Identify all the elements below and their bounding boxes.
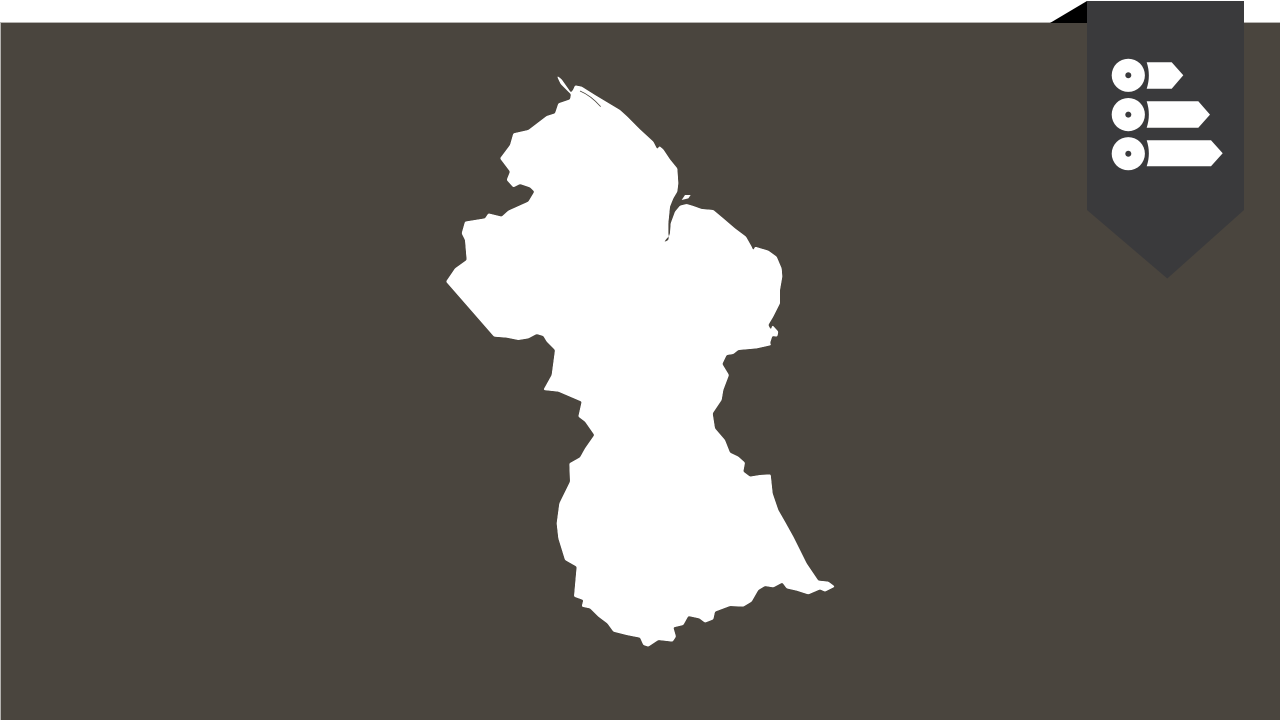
icon row 2: medium arrow xyxy=(1112,98,1210,131)
icon row 1: short arrow xyxy=(1112,59,1183,92)
ribbon fold: black triangle xyxy=(1050,1,1087,23)
icon: list with three arrows xyxy=(1112,59,1223,170)
map: Guyana silhouette xyxy=(446,75,835,647)
icon row 3: long arrow xyxy=(1112,137,1223,170)
ribbon badge xyxy=(1087,1,1244,278)
